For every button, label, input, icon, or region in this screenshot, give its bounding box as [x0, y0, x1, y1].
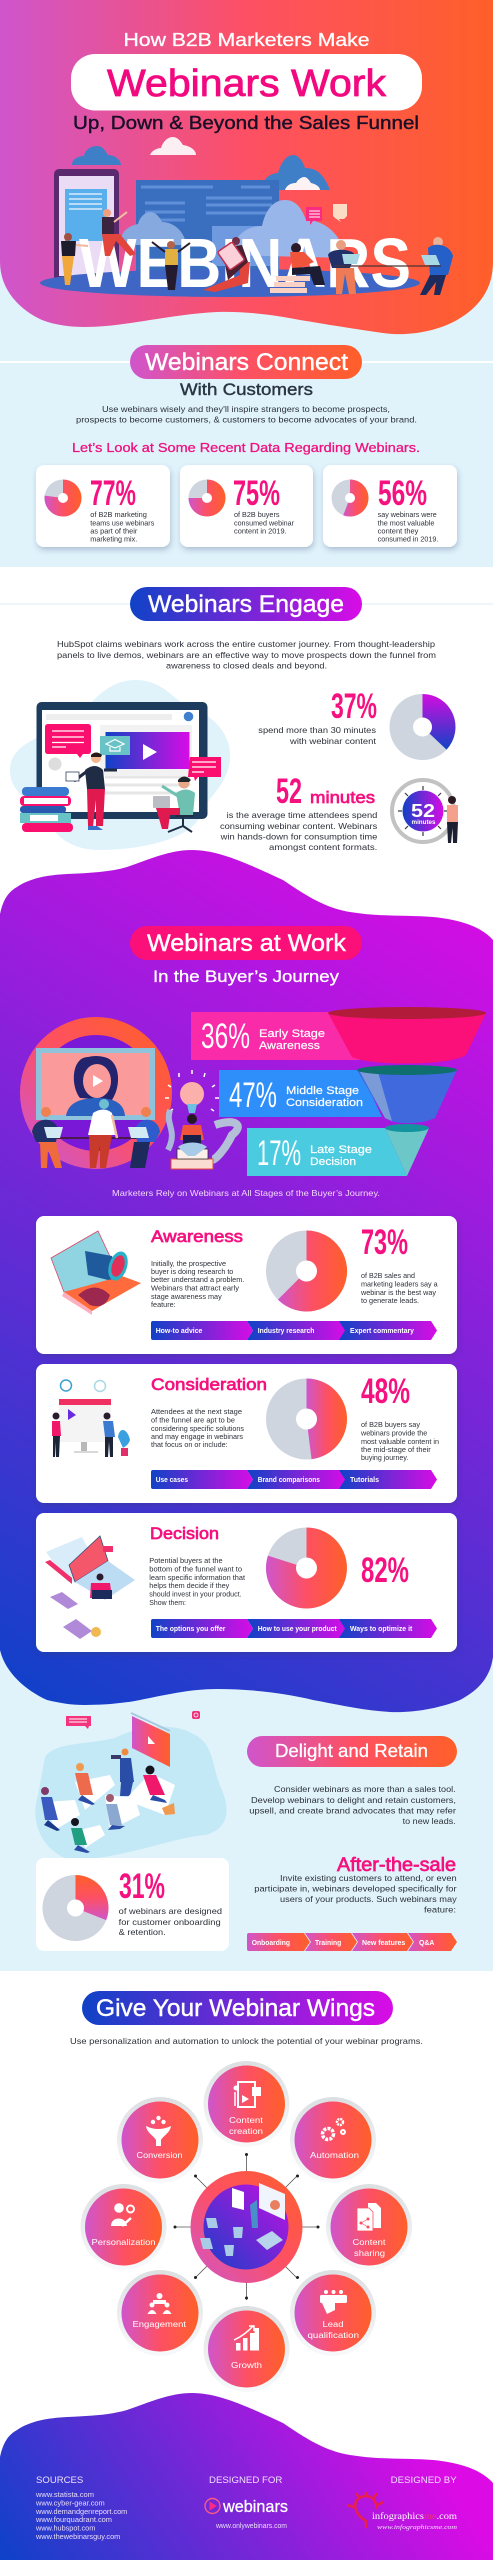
- body text: stage awareness may: [151, 1292, 222, 1301]
- bar: 47% middle stage consideration: Middle Stage: [286, 1085, 359, 1097]
- stat 52 minutes: win hands-down for consumption time: [220, 832, 378, 842]
- caption: Marketers Rely on Webinars at All Stages of the Buyer’s Journey.: [112, 1188, 380, 1198]
- chevrons: Onboarding: [252, 1940, 290, 1947]
- illustration: team watching webinar: [29, 1026, 238, 1169]
- chevrons: [247, 1933, 457, 1951]
- pink data heading: Let’s Look at Some Recent Data Regarding Webinars.: [72, 440, 420, 455]
- icon: people exchange: [148, 2293, 172, 2314]
- purple background: [0, 850, 493, 1712]
- sources list: SOURCES: [36, 2475, 83, 2486]
- stat 52 minutes: minutes: [310, 788, 375, 807]
- illustration: training room: [35, 1711, 227, 1860]
- funnel chart: [191, 1007, 486, 1176]
- body text: bottom of the funnel want to: [149, 1564, 242, 1574]
- heading pill: [82, 1991, 393, 2025]
- light clouds: [120, 200, 345, 258]
- funnel top section: [328, 1007, 486, 1064]
- presenter: [66, 752, 117, 830]
- seated man right: [128, 1107, 160, 1168]
- chevrons: Ways to optimize it: [350, 1626, 413, 1633]
- body text: that focus on or include:: [151, 1440, 228, 1449]
- stat card 56%: say webinars were: [378, 512, 437, 519]
- bar: 17% late stage decision: [247, 1128, 407, 1176]
- circle: personalization: Personalization: [92, 2237, 156, 2247]
- stat card 31%: of webinars are designed: [119, 1906, 222, 1916]
- stat 48%: [360, 1372, 439, 1462]
- stat 52 minutes: is the average time attendees spend: [227, 810, 378, 820]
- blob: [10, 680, 230, 850]
- bar: 47% middle stage consideration: Consideration: [286, 1097, 363, 1109]
- icon: buyer with laptop and money: [45, 1536, 135, 1639]
- monitor: [36, 702, 208, 819]
- stat card 77%: of B2B marketing: [90, 512, 147, 519]
- stat card 31%: & retention.: [119, 1927, 166, 1937]
- stat card 31%: for customer onboarding: [119, 1917, 221, 1927]
- circle: conversion: Conversion: [136, 2150, 183, 2160]
- center circle: [190, 2171, 302, 2283]
- stat card 77%: as part of their: [90, 528, 138, 536]
- big word WEBINARS: WEBINARS: [79, 224, 411, 302]
- body text: feature:: [151, 1300, 176, 1309]
- bar: 36% early stage awareness: 36%: [201, 1017, 250, 1056]
- stat 73%: webinar is the best way: [360, 1288, 436, 1297]
- chevrons: New features: [362, 1940, 405, 1947]
- designed by: www.infographicsme.com: [377, 2524, 457, 2531]
- icon: clock with 52 minutes: [392, 780, 458, 843]
- chevrons: Q&A: [419, 1940, 434, 1947]
- circle: lead qualification: Lead: [322, 2319, 344, 2329]
- bar: 17% late stage decision: Late Stage: [310, 1144, 372, 1156]
- section: delight and retain: [35, 1711, 457, 1951]
- icon: funnel: [146, 2116, 171, 2146]
- heading pill: [130, 926, 362, 960]
- icon: clock with 52 minutes: 52: [411, 801, 435, 821]
- stat 48%: most valuable content in: [361, 1437, 439, 1446]
- chevrons: [151, 1619, 437, 1638]
- ground: [40, 269, 420, 297]
- stat card 31%: 31%: [119, 1867, 165, 1906]
- stat card 77%: teams use webinars: [90, 520, 155, 528]
- funnel bottom section: [385, 1124, 429, 1176]
- stat card 75%: consumed webinar: [234, 520, 295, 528]
- stat 48%: of B2B buyers say: [361, 1420, 420, 1429]
- circle: automation: [290, 2097, 376, 2183]
- sources list: [35, 2475, 128, 2541]
- intro text: Use personalization and automation to unlock the potential of your webinar programs.: [70, 2036, 423, 2046]
- circle: conversion: [117, 2097, 203, 2183]
- ring: [29, 1026, 163, 1160]
- chevrons: [151, 1470, 437, 1489]
- stat card 56%: consumed in 2019.: [378, 536, 438, 544]
- stat card 56%: 56%: [378, 474, 427, 513]
- bar: 47% middle stage consideration: 47%: [229, 1076, 277, 1115]
- person with laptop on books: [171, 1114, 213, 1169]
- bar: 17% late stage decision: Decision: [310, 1156, 356, 1168]
- screen: [131, 1713, 170, 1767]
- text: after-the-sale: participate in, webinars developed specifically for: [254, 1884, 457, 1894]
- heading pill: [130, 345, 362, 379]
- stat 48%: the mid-stage of their: [361, 1445, 431, 1454]
- title: Decision: [150, 1524, 219, 1543]
- stat 82%: 82%: [361, 1551, 409, 1590]
- section: webinars engage: [0, 587, 493, 852]
- heading pill: Give Your Webinar Wings: [96, 1995, 375, 2022]
- intro text: [76, 404, 417, 424]
- stat 37 percent: [258, 687, 456, 760]
- intro text: [57, 639, 436, 670]
- body text: better understand a problem.: [151, 1275, 244, 1284]
- body text: considering specific solutions: [151, 1424, 244, 1433]
- people: [61, 209, 453, 295]
- circle: content sharing: sharing: [354, 2248, 385, 2258]
- stat 52 minutes: [220, 772, 378, 852]
- icon: content creation: [234, 2082, 261, 2107]
- stat 52 minutes: consuming webinar content. Webinars: [220, 821, 377, 831]
- title: Consideration: [151, 1375, 267, 1394]
- text: delight: upsell, and create brand advocates that may refer: [249, 1806, 456, 1816]
- text: delight: Consider webinars as more than a sales tool.: [274, 1784, 456, 1794]
- stat 52 minutes: 52: [276, 772, 302, 811]
- heading pill: Webinars at Work: [147, 930, 347, 957]
- divider line: [0, 361, 493, 363]
- connectors: [174, 2153, 320, 2300]
- speech bubble left: [45, 724, 91, 758]
- body text: learn specific information that: [149, 1573, 246, 1582]
- chevrons: Tutorials: [350, 1477, 379, 1484]
- body text: [151, 1259, 244, 1309]
- subtitle: Up, Down & Beyond the Sales Funnel: [73, 113, 419, 133]
- circle: content creation: [204, 2061, 290, 2147]
- clouds: [72, 137, 330, 190]
- lightbulb: [165, 1070, 219, 1113]
- text: delight: Develop webinars to delight and retain customers,: [251, 1795, 456, 1805]
- table: [50, 1137, 150, 1139]
- icon: gears: [322, 2119, 345, 2140]
- sources list: www.cyber-gear.com: [35, 2500, 105, 2508]
- icon: people at a review board: [52, 1380, 130, 1457]
- standing man: [88, 1099, 117, 1168]
- hero illustration: [40, 137, 453, 302]
- icon: growth bars: [234, 2326, 259, 2350]
- circle: engagement: [117, 2270, 203, 2356]
- pie 73: [266, 1230, 347, 1312]
- hero panel: [0, 0, 493, 334]
- bar: 17% late stage decision: 17%: [257, 1134, 301, 1173]
- icon: group and handshake: [320, 2290, 347, 2314]
- chevrons: [151, 1321, 437, 1340]
- icon: clock with 52 minutes: minutes: [412, 820, 436, 826]
- stat card 56%: content they: [378, 528, 419, 536]
- graduation box: [100, 736, 130, 755]
- intro text: awareness to closed deals and beyond.: [166, 660, 327, 670]
- body text: buyer is doing research to: [151, 1267, 233, 1276]
- chevrons: The options you offer: [156, 1626, 226, 1633]
- bar: 36% early stage awareness: Awareness: [259, 1040, 321, 1052]
- designed by: infographics me.com: [372, 2511, 458, 2522]
- pie 82: [266, 1528, 347, 1609]
- stat card 77%: [36, 465, 170, 547]
- stat 73%: marketing leaders say a: [361, 1280, 438, 1288]
- chat bubbles: [306, 204, 347, 225]
- circle: growth: Growth: [231, 2360, 262, 2370]
- heading: after-the-sale: After-the-sale: [337, 1855, 456, 1876]
- pre-title: How B2B Marketers Make: [124, 30, 370, 50]
- divider line: [0, 603, 493, 605]
- stat 52 minutes: amongst content formats.: [269, 842, 377, 852]
- heading pill: [247, 1736, 457, 1767]
- sources list: www.thewebinarsguy.com: [35, 2534, 121, 2541]
- stat 73%: 73%: [361, 1223, 408, 1262]
- body text: [151, 1407, 244, 1449]
- section: webinars at work: [0, 850, 493, 1712]
- stat card 77%: marketing mix.: [90, 536, 137, 544]
- circle: content sharing: Content: [352, 2237, 386, 2247]
- stat card 75%: 75%: [233, 474, 280, 513]
- stat card 56%: [323, 465, 457, 547]
- stat card 75%: content in 2019.: [234, 528, 287, 536]
- illustration: presenter at monitor: [10, 680, 230, 850]
- icon: documents share: [357, 2203, 381, 2231]
- stat 37 percent: 37%: [331, 687, 377, 726]
- bar: 36% early stage awareness: [191, 1012, 360, 1060]
- body text: Show them:: [149, 1598, 186, 1607]
- chevrons: How to use your product: [258, 1626, 337, 1633]
- title: Awareness: [151, 1227, 243, 1246]
- heading pill: Webinars Engage: [148, 591, 344, 618]
- section: give your webinar wings: [70, 1991, 423, 2392]
- designed for: [205, 2475, 288, 2530]
- books stack: [20, 787, 73, 832]
- circle: lead qualification: [290, 2270, 376, 2356]
- text: after-the-sale: users of your products. Such webinars may: [280, 1894, 457, 1904]
- tablet: [54, 169, 119, 285]
- speech bubble right: [188, 757, 221, 781]
- monitor: [36, 1048, 155, 1120]
- text: after-the-sale: Invite existing customers to attend, or even: [280, 1873, 457, 1883]
- section: webinars connect: [0, 345, 493, 547]
- circle: content creation: Content: [229, 2115, 264, 2125]
- chevrons: How-to advice: [156, 1328, 203, 1335]
- title pill: Webinars Work: [107, 63, 387, 105]
- text: after-the-sale: feature:: [424, 1904, 456, 1914]
- designed for: webinars: [222, 2497, 288, 2516]
- circle: growth: [204, 2306, 290, 2392]
- blob: [35, 1727, 227, 1860]
- body text: Attendees at the next stage: [151, 1407, 242, 1416]
- text: delight: to new leads.: [403, 1816, 456, 1826]
- designed by: DESIGNED BY: [391, 2475, 457, 2486]
- designed for: DESIGNED FOR: [209, 2475, 282, 2486]
- video player: [106, 732, 190, 769]
- seated woman: [153, 776, 195, 832]
- body text: Potential buyers at the: [149, 1556, 223, 1565]
- subheading: With Customers: [180, 380, 313, 399]
- intro text: Use webinars wisely and they'll inspire strangers to become prospects,: [102, 404, 390, 414]
- body text: [149, 1556, 246, 1607]
- intro text: prospects to become customers, & customers to become advocates of your brand.: [76, 414, 417, 424]
- chevrons: Industry research: [258, 1328, 314, 1335]
- footer panel: [0, 2393, 493, 2560]
- stat 73%: to generate leads.: [361, 1296, 419, 1305]
- stat 37 percent: spend more than 30 minutes: [258, 725, 376, 735]
- circle: content creation: creation: [229, 2126, 263, 2136]
- sources list: www.demandgenreport.com: [35, 2509, 128, 2516]
- text: delight: [249, 1784, 456, 1826]
- sources list: www.fourquadrant.com: [35, 2517, 112, 2524]
- plants: [168, 1110, 238, 1160]
- chat bubble: [66, 1716, 91, 1729]
- bar: 47% middle stage consideration: [219, 1070, 382, 1117]
- body text: Initially, the prospective: [151, 1259, 226, 1268]
- bar: 36% early stage awareness: Early Stage: [259, 1028, 325, 1040]
- circle: personalization: [80, 2184, 166, 2270]
- icon: laptop with megaphone: [51, 1231, 141, 1315]
- body text: and may engage in webinars: [151, 1432, 243, 1441]
- stat 73%: [360, 1223, 438, 1305]
- stat 73%: of B2B sales and: [361, 1271, 415, 1280]
- intro text: HubSpot claims webinars work across the entire customer journey. From thought-leadership: [57, 639, 435, 649]
- card: awareness: [36, 1216, 457, 1354]
- stat 37 percent: with webinar content: [289, 736, 377, 746]
- chevrons: Use cases: [156, 1477, 188, 1484]
- body text: Webinars that attract early: [151, 1284, 239, 1292]
- icon: person with gear: [111, 2203, 134, 2226]
- stat card 77%: 77%: [90, 474, 136, 513]
- orange folder: [162, 1803, 175, 1815]
- chevrons: Training: [315, 1940, 341, 1947]
- stat 48%: 48%: [361, 1372, 410, 1411]
- circle: automation: Automation: [310, 2150, 359, 2160]
- subheading: In the Buyer’s Journey: [153, 967, 340, 986]
- card: decision: [36, 1513, 457, 1652]
- heading pill: [130, 587, 362, 621]
- sources list: www.statista.com: [35, 2492, 94, 2499]
- heading pill: Delight and Retain: [275, 1741, 428, 1761]
- stat 48%: buying journey.: [361, 1453, 408, 1462]
- pie 48: [266, 1378, 347, 1460]
- funnel middle section: [357, 1065, 457, 1123]
- hero gradient background: [0, 0, 493, 334]
- stat card 31%: [36, 1858, 229, 1951]
- stat card 75%: of B2B buyers: [234, 512, 280, 519]
- designed by: [347, 2475, 458, 2531]
- title pill: [71, 54, 422, 110]
- card: consideration: [36, 1364, 457, 1503]
- stat card 75%: [180, 465, 313, 547]
- instagram-like icon: [192, 1711, 200, 1719]
- body text: should invest in your product.: [149, 1590, 242, 1598]
- stat 48%: webinars provide the: [360, 1428, 427, 1438]
- intro text: panels to live demos, webinars are an effective way to move prospects down the funnel from: [57, 650, 436, 660]
- sources list: www.hubspot.com: [35, 2526, 96, 2532]
- circle: engagement: Engagement: [132, 2319, 187, 2329]
- chevrons: Expert commentary: [350, 1328, 414, 1335]
- seated man left: [32, 1107, 63, 1168]
- body text: of the funnel are apt to be: [151, 1416, 235, 1424]
- body text: helps them decide if they: [149, 1581, 230, 1590]
- presenter: [111, 1748, 134, 1796]
- heading pill: Webinars Connect: [145, 349, 348, 376]
- stat card 56%: the most valuable: [378, 520, 435, 528]
- big web panel: [136, 180, 279, 280]
- designed for: www.onlywebinars.com: [215, 2523, 287, 2530]
- text: after-the-sale: [254, 1873, 457, 1914]
- circle: content sharing: [326, 2184, 412, 2270]
- chevrons: Brand comparisons: [258, 1477, 320, 1484]
- desks and attendees: [41, 1763, 175, 1853]
- circle: lead qualification: qualification: [308, 2330, 359, 2340]
